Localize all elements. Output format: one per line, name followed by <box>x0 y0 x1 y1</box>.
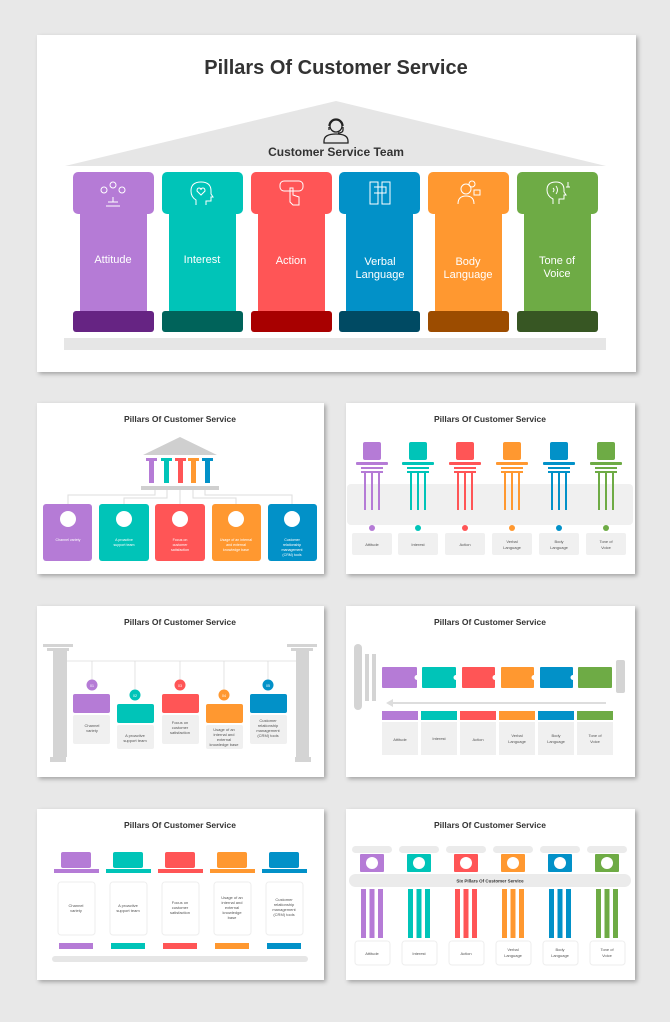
labels: Action <box>459 542 471 547</box>
labels: Verbal <box>506 539 518 544</box>
pillar bars <box>361 889 618 938</box>
laptop items: Usage of an <box>221 895 243 900</box>
steps: external <box>217 737 231 742</box>
labels: Voice <box>601 545 612 550</box>
labels: Tone of <box>588 733 602 738</box>
panel: slide 7 (six pillars band) <box>346 809 635 980</box>
panel: slide 5 (puzzle row) <box>346 606 635 777</box>
cards: Channel variety <box>56 538 81 542</box>
cards: A proactive <box>115 538 133 542</box>
steps: 01 <box>90 684 94 688</box>
caps <box>352 846 627 853</box>
pillar: Verbal Language <box>339 172 420 332</box>
labels: Interest <box>432 736 447 741</box>
panel: main slide <box>37 35 636 372</box>
laptop items: relationship <box>274 902 295 907</box>
gray band <box>347 484 633 525</box>
title: Pillars Of Customer Service <box>124 414 236 424</box>
labels: Language <box>503 545 522 550</box>
steps: Channel <box>85 723 100 728</box>
laptop items: customer <box>172 905 189 910</box>
labels: Body <box>555 947 565 952</box>
labels: Language <box>550 545 569 550</box>
labels: Voice <box>602 953 613 958</box>
labels: Language <box>551 953 570 958</box>
band: Six Pillars Of Customer Service: Six Pillars Of Customer Service <box>456 878 524 884</box>
labels: Tone of <box>600 947 614 952</box>
laptop items: management <box>272 907 297 912</box>
labels: Action <box>472 737 484 742</box>
cards: relationship <box>283 543 301 547</box>
pillar: Verbal Language: Verbal <box>364 256 396 268</box>
side columns <box>43 644 317 762</box>
steps: relationship <box>258 723 279 728</box>
steps: knowledge base <box>210 742 239 747</box>
temple roof <box>143 437 217 455</box>
laptop items: variety <box>70 908 82 913</box>
labels: Interest <box>411 542 426 547</box>
laptop items: (CRM) tools <box>273 912 295 917</box>
steps: (CRM) tools <box>257 733 279 738</box>
floor <box>64 338 606 350</box>
labels: Tone of <box>599 539 613 544</box>
steps: internal and <box>214 732 234 737</box>
icon squares <box>360 854 619 872</box>
labels: Attitude <box>365 542 380 547</box>
pillar: Action <box>251 172 332 332</box>
icon: customer service agent <box>324 119 348 143</box>
pillar: Tone of Voice <box>517 172 598 332</box>
pillar: Interest <box>162 172 243 332</box>
panel: slide 6 (laptops) <box>37 809 324 980</box>
labels: Verbal <box>507 947 519 952</box>
laptop items: base <box>228 915 237 920</box>
steps: customer <box>172 725 189 730</box>
cards: (CRM) tools <box>282 553 302 557</box>
cards <box>43 504 317 561</box>
labels <box>382 711 613 755</box>
title: Pillars Of Customer Service <box>434 414 546 424</box>
panel: slide 3 (column pillars with dots) <box>346 403 635 574</box>
pillar: Body Language <box>428 172 509 332</box>
pillar: Verbal Language: Language <box>356 269 404 281</box>
steps: 04 <box>222 694 226 698</box>
steps <box>73 680 287 749</box>
roof <box>65 101 606 166</box>
laptop items: Channel <box>69 903 84 908</box>
labels: Language <box>504 953 523 958</box>
steps: 05 <box>266 684 270 688</box>
title: Pillars Of Customer Service <box>124 820 236 830</box>
cards: and external <box>226 543 246 547</box>
steps: Usage of an <box>213 727 235 732</box>
cards: management <box>282 548 302 552</box>
columns <box>356 442 622 531</box>
steps: Customer <box>259 718 277 723</box>
puzzle pieces <box>382 667 612 688</box>
labels: Attitude <box>393 737 408 742</box>
cards: Usage of an internal <box>220 538 252 542</box>
labels: Verbal <box>511 733 523 738</box>
laptop items: satisfaction <box>170 910 190 915</box>
cards: customer <box>173 543 188 547</box>
pillar: Interest: Interest <box>184 254 220 266</box>
labels <box>352 533 626 555</box>
arrow <box>386 699 606 707</box>
steps: 03 <box>178 684 182 688</box>
title: Pillars Of Customer Service <box>124 617 236 627</box>
connectors <box>68 490 292 504</box>
title: Pillars Of Customer Service <box>204 57 468 79</box>
laptop items: A proactive <box>118 903 139 908</box>
left bracket <box>354 644 625 710</box>
pillar: Action: Action <box>276 255 306 267</box>
pillar: Tone of Voice: Voice <box>544 268 570 280</box>
laptop items <box>54 852 307 949</box>
pillar: Tone of Voice: Tone of <box>539 255 576 267</box>
steps: support team <box>123 738 147 743</box>
labels: Action <box>460 951 472 956</box>
cards: support team <box>114 543 134 547</box>
labels <box>355 941 625 965</box>
laptop items: Focus on <box>172 900 188 905</box>
steps: satisfaction <box>170 730 190 735</box>
labels: Attitude <box>365 951 380 956</box>
cards: satisfaction <box>171 548 189 552</box>
title: Pillars Of Customer Service <box>434 617 546 627</box>
steps: variety <box>86 728 98 733</box>
pillar: Body Language: Language <box>444 269 492 281</box>
labels: Voice <box>590 739 601 744</box>
steps: management <box>256 728 281 733</box>
laptop items: knowledge <box>222 910 242 915</box>
labels: Language <box>547 739 566 744</box>
cards: Customer <box>284 538 301 542</box>
cards: Focus on <box>173 538 187 542</box>
labels: Body <box>554 539 564 544</box>
laptop items: Customer <box>275 897 293 902</box>
band: Six Pillars Of Customer Service <box>349 874 631 887</box>
labels: Language <box>508 739 527 744</box>
pillar: Body Language: Body <box>455 256 481 268</box>
laptop items: external <box>225 905 239 910</box>
pillar: Attitude: Attitude <box>94 254 132 266</box>
panel: slide 2 (temple with cards) <box>37 403 324 574</box>
small pillars <box>146 458 213 483</box>
laptop items: internal and <box>222 900 242 905</box>
pillar: Attitude <box>73 172 154 332</box>
heading: Customer Service Team: Customer Service Team <box>268 145 404 159</box>
panel: slide 4 (hanging steps between columns) <box>37 606 324 777</box>
steps: Focus on <box>172 720 188 725</box>
labels: Interest <box>412 951 427 956</box>
steps: 02 <box>133 694 137 698</box>
laptop items: support team <box>116 908 140 913</box>
cards: knowledge base <box>223 548 249 552</box>
labels: Body <box>551 733 561 738</box>
title: Pillars Of Customer Service <box>434 820 546 830</box>
steps: A proactive <box>125 733 146 738</box>
